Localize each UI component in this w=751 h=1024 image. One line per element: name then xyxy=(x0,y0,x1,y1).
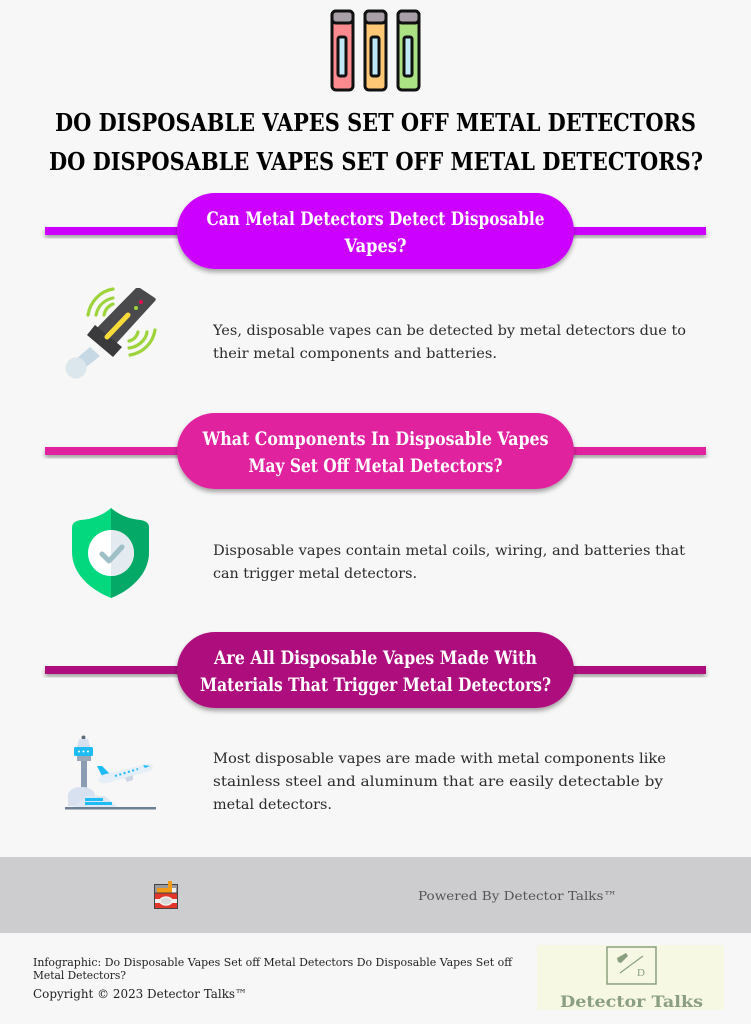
icon: three vape pens xyxy=(332,11,419,90)
powered by label: Powered By Detector Talks™ xyxy=(418,888,617,903)
section 3 text xyxy=(213,751,666,813)
logo: Detector Talks: D xyxy=(637,967,645,979)
section 2 heading xyxy=(45,413,706,489)
infographic caption xyxy=(33,956,513,982)
section 1 heading: Can Metal Detectors Detect Disposable xyxy=(206,209,544,230)
infographic caption: Metal Detectors? xyxy=(33,969,126,982)
section 1 heading: Vapes? xyxy=(344,236,407,257)
section 3 text: stainless steel and aluminum that are easily detectable by xyxy=(213,774,663,790)
section 3 text: metal detectors. xyxy=(213,797,332,813)
section 1 heading xyxy=(45,193,706,269)
icon: shield with check xyxy=(72,508,149,598)
section 3 heading xyxy=(45,632,706,708)
section 3 text: Most disposable vapes are made with metal components like xyxy=(213,751,666,767)
section 1 text xyxy=(212,323,686,362)
logo: Detector Talks: Detector Talks xyxy=(560,992,703,1011)
icon: cigarette pack xyxy=(154,881,178,908)
section 2 text: can trigger metal detectors. xyxy=(213,566,417,582)
section 1 text: Yes, disposable vapes can be detected by metal detectors due to xyxy=(212,323,686,339)
section 2 text xyxy=(213,543,686,582)
section 1 text: their metal components and batteries. xyxy=(213,346,497,362)
footer band xyxy=(0,857,751,933)
icon: handheld metal detector xyxy=(66,288,156,378)
section 2 text: Disposable vapes contain metal coils, wiring, and batteries that xyxy=(213,543,686,559)
icon: airport tower and plane xyxy=(65,736,156,810)
section 3 heading: Materials That Trigger Metal Detectors? xyxy=(200,675,551,696)
section 3 heading: Are All Disposable Vapes Made With xyxy=(213,648,537,669)
copyright: Copyright © 2023 Detector Talks™ xyxy=(33,987,247,1001)
section 2 heading: What Components In Disposable Vapes xyxy=(202,429,548,450)
title xyxy=(49,108,703,176)
infographic caption: Infographic: Do Disposable Vapes Set off Metal Detectors Do Disposable Vapes Set off xyxy=(33,956,513,969)
logo: Detector Talks xyxy=(537,945,724,1011)
section 2 heading: May Set Off Metal Detectors? xyxy=(248,456,503,477)
